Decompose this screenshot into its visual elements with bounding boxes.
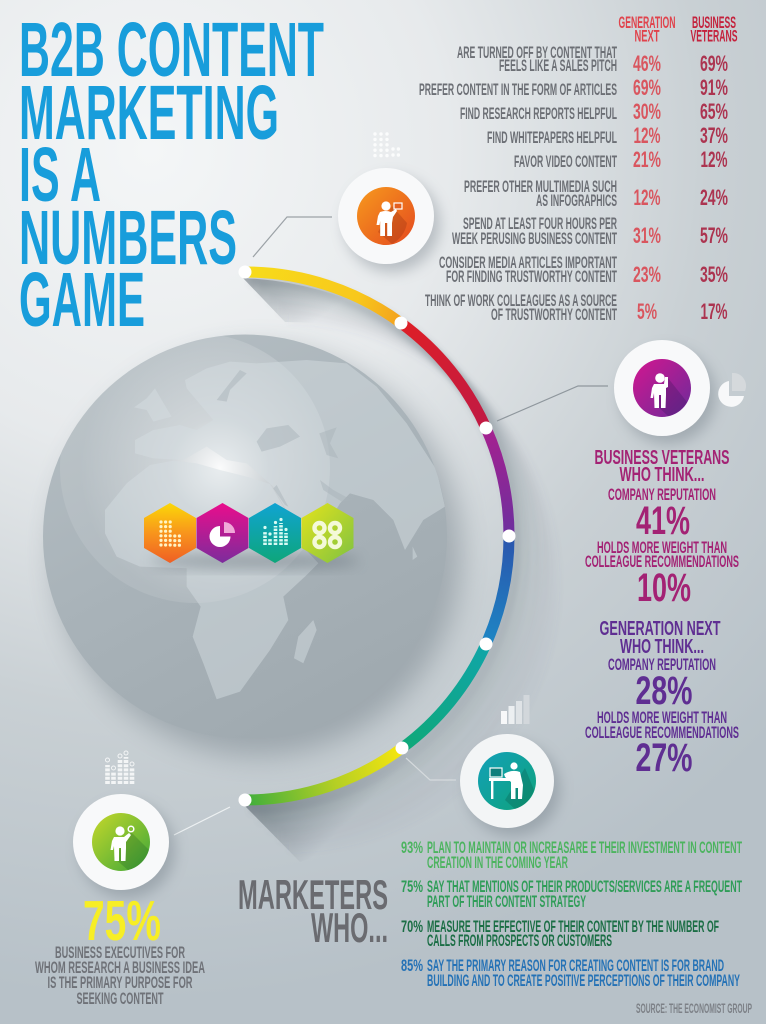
title: B2B CONTENT bbox=[19, 7, 324, 93]
generation next values: 5% bbox=[637, 299, 657, 324]
business veterans values: 24% bbox=[700, 185, 728, 210]
business veterans values: 35% bbox=[700, 262, 728, 287]
hexagon: lime donuts bbox=[302, 503, 354, 563]
row labels: SPEND AT LEAST FOUR HOURS PER bbox=[463, 215, 617, 233]
business veterans values: 57% bbox=[700, 223, 728, 248]
generation next values: 69% bbox=[633, 75, 661, 100]
panel: generation next who think bbox=[585, 618, 739, 780]
item 93 percent: CREATION IN THE COMING YEAR bbox=[427, 854, 568, 872]
column header: generation next bbox=[618, 14, 676, 46]
hexagon: orange dots bbox=[144, 503, 196, 563]
panel: 75 percent business executives bbox=[35, 889, 205, 1008]
business veterans values: 37% bbox=[700, 123, 728, 148]
heading: marketers who bbox=[238, 871, 388, 951]
stat description: IS THE PRIMARY PURPOSE FOR bbox=[48, 974, 193, 992]
arc long shadow bbox=[243, 278, 553, 862]
hexagon icon row bbox=[144, 503, 360, 569]
item 93 percent bbox=[401, 839, 742, 872]
seas bbox=[217, 370, 352, 507]
segmented arc bbox=[245, 272, 509, 800]
icon badge: orange person with tablet bbox=[338, 168, 440, 272]
panel: generation next who think: 28% bbox=[636, 669, 692, 713]
item 93 percent: 93% bbox=[401, 839, 423, 857]
arc offset shadow bbox=[250, 279, 553, 846]
business veterans values: 65% bbox=[700, 99, 728, 124]
big yellow stat: 75% bbox=[83, 889, 161, 953]
icon: dotted L chart bbox=[375, 134, 402, 160]
column header: generation next: GENERATION bbox=[618, 14, 676, 32]
icon: equalizer bbox=[106, 751, 134, 784]
item 85 percent bbox=[401, 957, 740, 990]
item 75 percent: 75% bbox=[401, 878, 423, 896]
business veterans values: 91% bbox=[700, 75, 728, 100]
generation next values: 12% bbox=[634, 123, 660, 148]
generation next values: 12% bbox=[634, 185, 660, 210]
comparison table bbox=[419, 14, 738, 324]
row labels: AS INFOGRAPHICS bbox=[536, 192, 617, 210]
generation next values: 30% bbox=[633, 99, 661, 124]
stat description: BUSINESS EXECUTIVES FOR bbox=[55, 944, 185, 962]
icon badge: purple person on phone bbox=[614, 340, 716, 444]
top wedge shadow bbox=[243, 278, 401, 345]
title: NUMBERS bbox=[19, 195, 237, 281]
title: IS A bbox=[19, 132, 101, 218]
heading: marketers who: MARKETERS bbox=[238, 871, 388, 918]
heading: marketers who: WHO... bbox=[311, 904, 388, 951]
item 85 percent: 85% bbox=[401, 957, 423, 975]
arc nodes bbox=[238, 266, 516, 806]
item 75 percent bbox=[401, 878, 742, 911]
stat description: WHOM RESEARCH A BUSINESS IDEA bbox=[35, 959, 205, 977]
globe sphere bbox=[43, 334, 447, 738]
panel: business veterans who think: 10% bbox=[637, 566, 691, 610]
column header: business veterans bbox=[690, 14, 738, 46]
hexagon row shadow bbox=[150, 553, 360, 569]
column header: generation next: NEXT bbox=[634, 28, 660, 46]
panel: business veterans who think: 41% bbox=[636, 499, 690, 543]
icon: rising bars bbox=[501, 695, 530, 724]
row labels: FAVOR VIDEO CONTENT bbox=[514, 153, 617, 171]
item 70 percent bbox=[401, 918, 719, 950]
panel: business veterans who think bbox=[585, 447, 739, 610]
row labels: ARE TURNED OFF BY CONTENT THAT bbox=[457, 44, 617, 62]
stat description: SEEKING CONTENT bbox=[76, 990, 164, 1008]
generation next values bbox=[633, 51, 661, 324]
generation next values: 46% bbox=[633, 51, 661, 76]
generation next values: 23% bbox=[633, 262, 661, 287]
continents bbox=[105, 360, 445, 699]
stat description bbox=[35, 944, 205, 1008]
title bbox=[19, 7, 324, 343]
icon badge: green person with magnifier bbox=[73, 794, 175, 898]
globe bbox=[43, 333, 462, 756]
row labels: OF TRUSTWORTHY CONTENT bbox=[491, 306, 617, 324]
panel: generation next who think: WHO THINK... bbox=[620, 636, 704, 658]
icon badge: teal person at desk bbox=[460, 734, 560, 836]
title: MARKETING bbox=[19, 70, 279, 156]
globe highlight bbox=[60, 333, 445, 699]
row labels bbox=[419, 44, 617, 324]
marketers list bbox=[401, 839, 742, 990]
generation next values: 31% bbox=[633, 223, 661, 248]
business veterans values: 69% bbox=[700, 51, 728, 76]
title: GAME bbox=[19, 257, 145, 343]
globe shadow bbox=[54, 348, 462, 756]
bottom wedge shadow bbox=[245, 752, 440, 862]
item 75 percent: PART OF THEIR CONTENT STRATEGY bbox=[427, 893, 586, 911]
panel: business veterans who think: WHO THINK... bbox=[620, 464, 704, 486]
row labels: PREFER OTHER MULTIMEDIA SUCH bbox=[464, 178, 617, 196]
hexagon: magenta pie bbox=[196, 503, 248, 563]
business veterans values: 12% bbox=[700, 147, 728, 172]
row labels: FOR FINDING TRUSTWORTHY CONTENT bbox=[446, 268, 617, 286]
icon: pie chart bbox=[718, 373, 746, 407]
row labels: FIND RESEARCH REPORTS HELPFUL bbox=[460, 105, 617, 123]
business veterans values bbox=[700, 51, 728, 324]
row labels: WEEK PERUSING BUSINESS CONTENT bbox=[452, 230, 617, 248]
generation next values: 21% bbox=[633, 147, 661, 172]
row labels: FIND WHITEPAPERS HELPFUL bbox=[487, 129, 617, 147]
row labels: CONSIDER MEDIA ARTICLES IMPORTANT bbox=[439, 254, 617, 272]
connector lines bbox=[174, 217, 608, 835]
panel: generation next who think: 27% bbox=[636, 736, 692, 780]
business veterans values: 17% bbox=[700, 299, 728, 324]
row labels: FEELS LIKE A SALES PITCH bbox=[499, 57, 617, 75]
item 70 percent: 70% bbox=[401, 918, 423, 936]
hexagon: teal equalizer bbox=[249, 503, 301, 563]
